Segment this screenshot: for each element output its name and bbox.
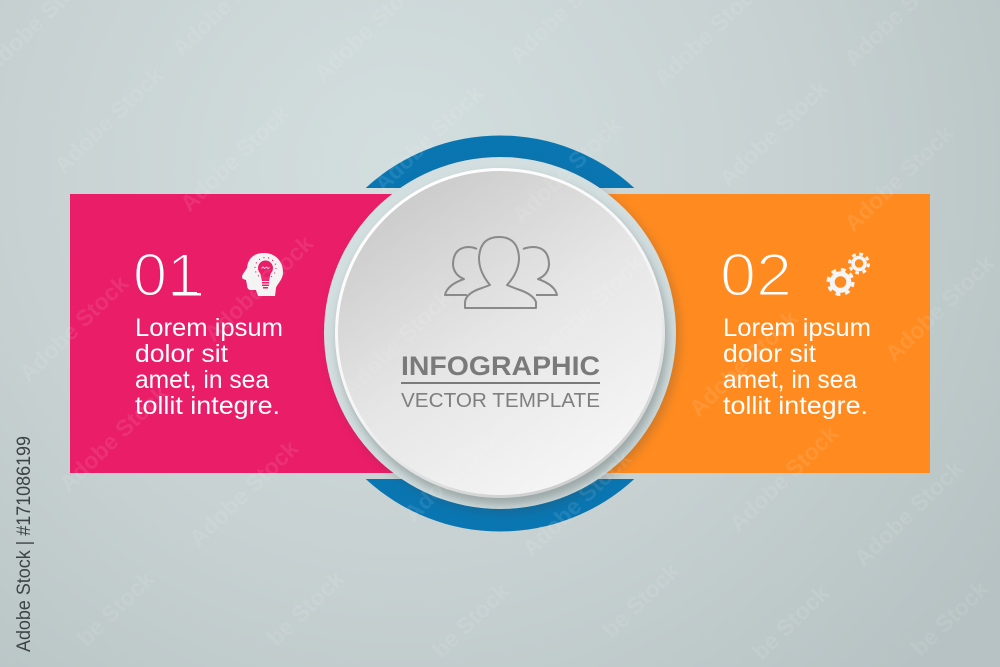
- watermarks: Adobe Stock: [517, 445, 636, 561]
- subheading: vector template: VECTOR TEMPLATE: [401, 390, 600, 412]
- watermarks: Adobe Stock: [54, 380, 173, 496]
- watermarks: Adobe Stock: [529, 250, 648, 366]
- watermarks: Adobe Stock: [507, 112, 626, 228]
- watermarks: be Stock: [747, 579, 834, 665]
- panel: 02 orange: [500, 194, 930, 473]
- watermarks: Adobe Stock: [724, 420, 843, 536]
- watermarks: be Stock: [262, 565, 349, 651]
- blue ring: top arc: [366, 135, 634, 188]
- watermarks: Adobe Stock: [369, 80, 488, 196]
- blue ring: bottom arc: [366, 479, 634, 532]
- watermarks: Adobe Stock: [849, 455, 968, 571]
- text block 01: dolor sit: [135, 340, 228, 368]
- watermarks: be Stock: [427, 577, 514, 663]
- watermarks: Adobe Stock: [399, 410, 518, 526]
- watermarks: Adobe Stock: [49, 62, 168, 178]
- number 01: 01: [133, 242, 201, 308]
- text block 02: dolor sit: [723, 340, 816, 368]
- halo shadow on panels: [328, 161, 680, 513]
- disc shadow: [338, 175, 668, 505]
- watermarks: Adobe Stock: [184, 435, 303, 551]
- watermarks: Adobe Stock: [839, 120, 958, 236]
- icon: group of people: [445, 237, 557, 308]
- watermarks: Adobe Stock: [880, 250, 999, 366]
- text block 02: tollit integre.: [723, 392, 868, 420]
- watermarks: Adobe Stock: [14, 270, 133, 386]
- watermarks: be Stock: [906, 575, 993, 661]
- number 02: 02: [720, 242, 792, 308]
- icon: head with light bulb: [242, 253, 283, 296]
- text block 01: [135, 314, 283, 420]
- panel: 01 pink: [70, 194, 500, 473]
- text block 01: Lorem ipsum: [135, 314, 283, 342]
- watermarks: be Stock: [597, 557, 684, 643]
- central disc: [336, 170, 664, 496]
- stock id label: Adobe Stock | #171086199: [14, 436, 35, 652]
- text block 02: [723, 314, 871, 420]
- watermarks: Adobe Stock: [337, 285, 456, 401]
- watermarks: Adobe Stock: [199, 230, 318, 346]
- watermarks: Adobe Stock: [714, 75, 833, 191]
- watermarks: Adobe Stock: [684, 305, 803, 421]
- text block 01: amet, in sea: [135, 366, 269, 394]
- text block 02: amet, in sea: [723, 366, 857, 394]
- watermarks: be Stock: [72, 565, 159, 651]
- icon: gears: [828, 254, 868, 294]
- watermarks: Adobe Stock: [175, 100, 294, 216]
- text block 01: tollit integre.: [135, 392, 280, 420]
- halo disc: [324, 157, 676, 509]
- heading: infographic: INFOGRAPHIC: [401, 351, 600, 381]
- text block 02: Lorem ipsum: [723, 314, 871, 342]
- heading rule: [401, 382, 600, 384]
